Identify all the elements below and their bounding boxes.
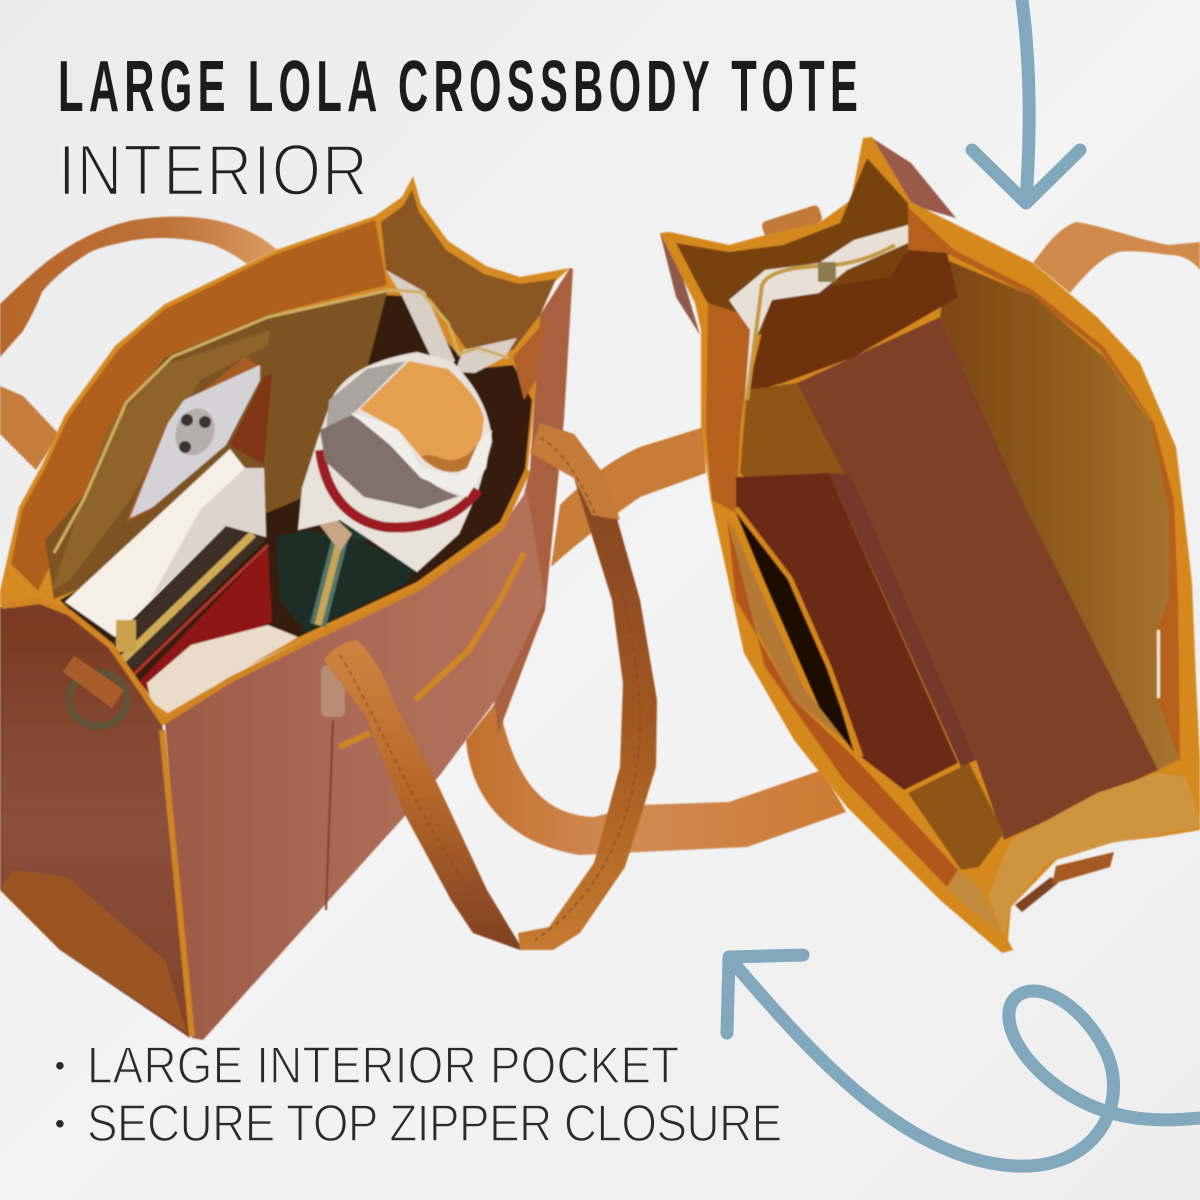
right leather tab [513,319,547,400]
notebook [65,449,266,637]
white collar [350,412,492,497]
bullet marks: • [55,1108,65,1139]
leather pocket lip [11,220,387,591]
bullet marks [55,1050,65,1139]
light suede patch [52,330,270,590]
bullet marks: • [55,1050,65,1081]
right inner leather lip [908,207,1180,760]
zipper tape [729,225,908,400]
bullet two: SECURE TOP ZIPPER CLOSURE [87,1095,782,1153]
straps behind bags [0,217,1200,855]
strap left run [324,640,520,950]
corner suede [908,763,1004,870]
front strap of left bag [324,423,657,950]
grey lid [320,415,459,509]
red zip wallet [111,526,272,692]
fabric strap [386,270,455,372]
title: LARGE LOLA CROSSBODY TOTE [58,47,858,127]
fabric strap right [455,338,517,373]
opening rim [0,176,570,722]
ring hardware [63,656,127,726]
back suede panel [381,190,556,350]
suede pocket [45,292,387,599]
right bag (top view of interior) [660,137,1200,953]
upper grey shell [325,361,406,440]
right gusset [488,268,573,734]
bag floor [797,317,1158,840]
dark bag interior [60,295,532,710]
upper strap between bags [551,427,706,567]
pink end tab [872,138,956,218]
lenses [179,414,211,453]
phone back [130,365,260,518]
bullet list [55,1037,782,1153]
lid shadow [421,434,482,472]
phone [126,357,262,522]
left floor suede [740,383,851,493]
rear handle joining lower strap [466,700,846,855]
left bag [0,176,573,1040]
bottom strap underside [1015,877,1058,912]
side suede in pocket [730,520,850,745]
pocket orange edge [736,508,861,757]
arrow: top pointing down [972,0,1080,203]
zipper [54,290,509,553]
strap top orange [530,423,620,520]
strap loop tab [761,204,823,240]
bottom strap tab [1052,852,1114,884]
back wall suede [676,158,915,340]
pocket leather [736,473,958,790]
black pocket cavity [736,513,854,752]
vertical seam [326,720,333,910]
tan corner [947,870,1001,933]
right suede wall [940,260,1179,770]
bottle body [298,352,492,572]
red brown pocket flap [230,373,272,465]
phone leather pocket [126,357,262,522]
green pouch [276,506,417,633]
end panel [0,602,190,1038]
strap tab [321,665,345,717]
white sliver [1157,630,1160,698]
right bag orange rim [660,137,1200,953]
zipper track [747,245,895,400]
stitching [340,438,640,940]
left pink tab [660,233,700,335]
lower left lip [727,517,958,887]
bottom suede flap [988,773,1200,937]
strap right run [518,423,657,950]
bullet one: LARGE INTERIOR POCKET [87,1037,679,1095]
water bottle [298,352,492,572]
left lip [706,303,752,513]
red band [320,450,478,528]
base shadow [0,870,187,1033]
pocket strip [829,473,976,767]
front panel [165,490,545,1040]
zipper pull [818,262,836,282]
left bag side strap [0,386,59,470]
left bag rear handle [0,217,277,357]
arrow: bottom looping to the left [727,955,1200,1166]
subtitle: INTERIOR [58,131,368,211]
top right handle [1033,222,1200,293]
camera bump [169,403,221,461]
dark zipper wall [747,250,958,393]
rim and edges [2,470,528,1036]
bottle orange lid [360,361,484,472]
cream pouch [147,625,298,713]
